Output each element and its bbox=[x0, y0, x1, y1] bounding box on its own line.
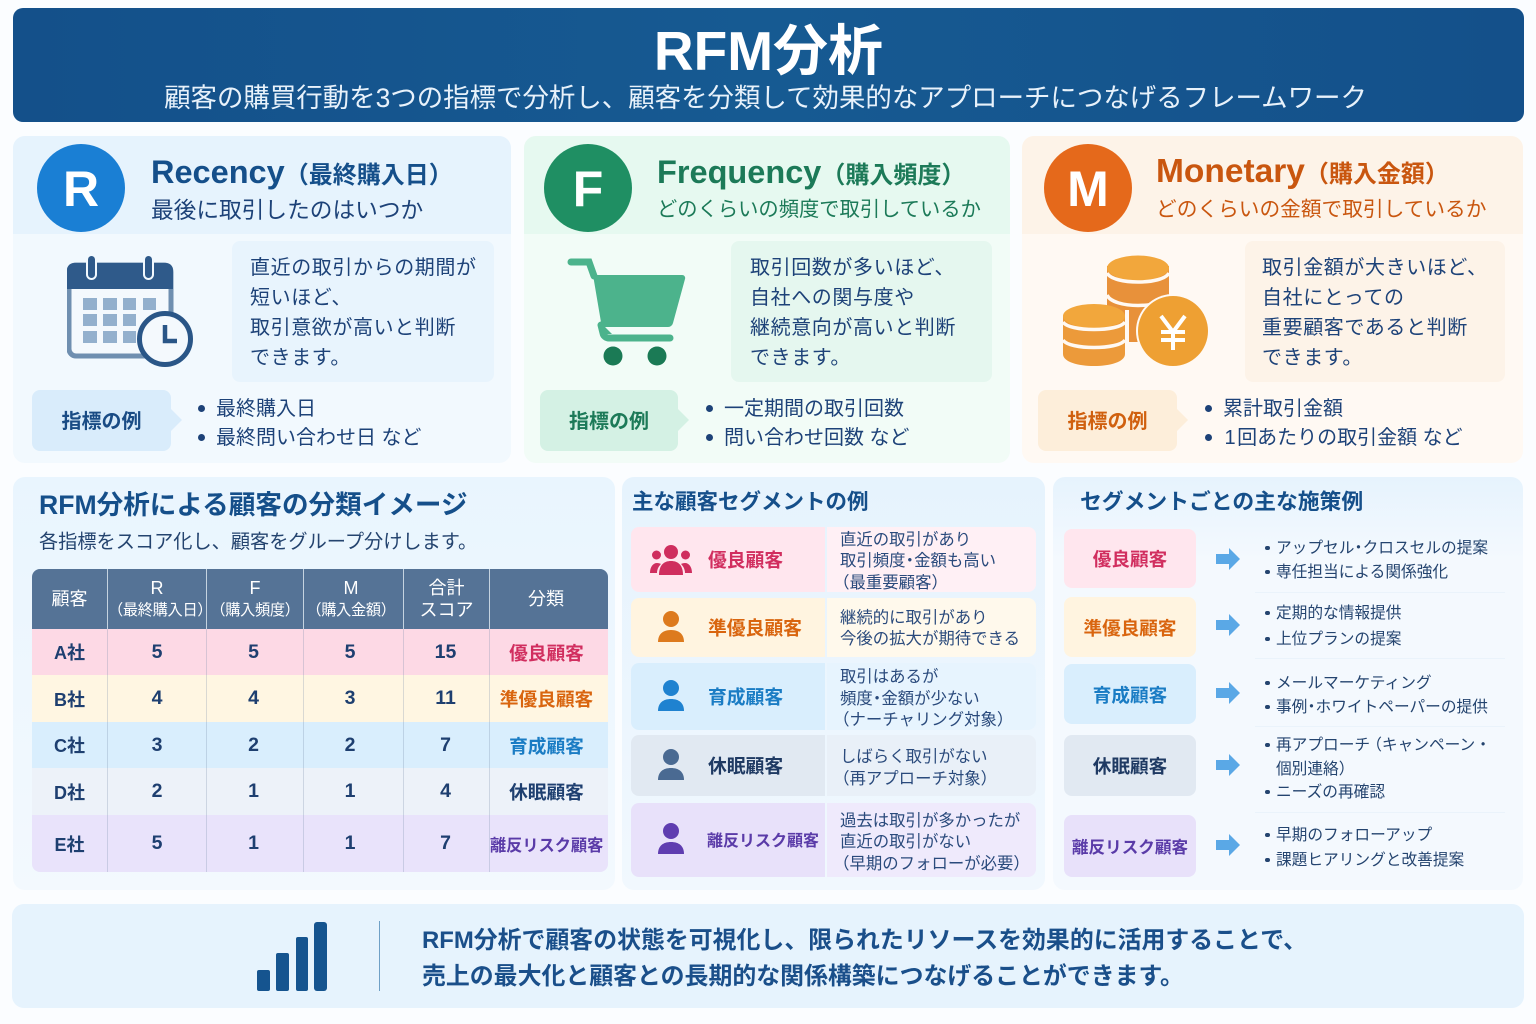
table: 2 bbox=[248, 734, 259, 756]
title: RFM分析 bbox=[654, 20, 883, 82]
segment: premium bbox=[631, 527, 1036, 592]
callout: indicator examples bbox=[32, 390, 171, 451]
actions: 早期のフォローアップ bbox=[1276, 827, 1432, 844]
description: できます。 bbox=[250, 347, 351, 369]
table bbox=[32, 569, 608, 872]
question: 最後に取引したのはいつか bbox=[151, 197, 423, 223]
header banner bbox=[13, 8, 1524, 122]
description box bbox=[1245, 241, 1505, 382]
actions: 再アプローチ（キャンペーン・ bbox=[1276, 737, 1491, 754]
header band bbox=[524, 136, 1010, 234]
description: 直近の取引からの期間が bbox=[250, 257, 477, 279]
panel: measures by segment bbox=[1053, 477, 1523, 890]
description: できます。 bbox=[1262, 347, 1363, 369]
description: 取引回数が多いほど、 bbox=[750, 257, 955, 279]
table: 分類 bbox=[528, 589, 564, 609]
table: 合計 bbox=[428, 578, 464, 598]
table: 1 bbox=[345, 832, 355, 854]
description box bbox=[232, 241, 494, 382]
indicator list: 一定期間の取引回数 bbox=[724, 398, 904, 420]
table: スコア bbox=[420, 600, 474, 620]
table: 離反リスク顧客 bbox=[490, 836, 603, 854]
table: 1 bbox=[248, 832, 259, 854]
table: M bbox=[344, 578, 358, 598]
label: 離反リスク顧客 bbox=[707, 833, 819, 850]
description: 短いほど、 bbox=[250, 287, 352, 309]
description: （最重要顧客） bbox=[833, 574, 948, 592]
label block bbox=[631, 663, 825, 730]
actions: 上位プランの提案 bbox=[1276, 631, 1402, 648]
callout: indicator examples: 指標の例 bbox=[569, 411, 649, 433]
callout: indicator examples: 指標の例 bbox=[1068, 411, 1148, 433]
description: （早期のフォローが必要） bbox=[833, 855, 1030, 873]
subtitle: 顧客の購買行動を3つの指標で分析し、顧客を分類して効果的なアプローチにつなげるフレームワーク bbox=[164, 83, 1367, 113]
actions: ニーズの再確認 bbox=[1276, 784, 1385, 801]
measure: nurture bbox=[1064, 664, 1488, 724]
description: 直近の取引がない bbox=[840, 833, 971, 851]
measure: churn risk bbox=[1064, 815, 1464, 877]
description bbox=[827, 527, 1036, 592]
description bbox=[827, 803, 1036, 877]
badge F: F bbox=[573, 161, 603, 217]
table: 4 bbox=[152, 687, 162, 709]
badge M: M bbox=[1067, 161, 1109, 217]
segment: dormant bbox=[631, 735, 997, 796]
indicator list: 累計取引金額 bbox=[1223, 398, 1343, 420]
label block bbox=[631, 735, 825, 796]
table: 3 bbox=[345, 687, 355, 709]
arrow bbox=[1216, 834, 1240, 856]
header band bbox=[13, 136, 511, 234]
panel: Monetary bbox=[1022, 136, 1523, 463]
description bbox=[827, 735, 1036, 796]
table: 7 bbox=[440, 734, 451, 756]
actions bbox=[1265, 604, 1402, 648]
label block bbox=[631, 803, 825, 877]
indicator list: 問い合わせ回数 など bbox=[724, 427, 910, 449]
table: （購入頻度） bbox=[210, 602, 300, 618]
panel: summary footer bbox=[12, 904, 1524, 1008]
actions: 事例・ホワイトペーパーの提供 bbox=[1276, 699, 1488, 716]
description: 頻度・金額が少ない bbox=[840, 690, 980, 708]
table: （最終購入日） bbox=[108, 602, 212, 618]
icon: shopping cart bbox=[568, 258, 686, 366]
table: E社 bbox=[54, 834, 84, 854]
header band bbox=[1022, 136, 1523, 234]
description: しばらく取引がない bbox=[840, 748, 988, 766]
indicator list: 1回あたりの取引金額 など bbox=[1224, 427, 1463, 449]
arrow bbox=[1216, 754, 1240, 776]
icon: person bbox=[658, 680, 684, 711]
description: 取引金額が大きいほど、 bbox=[1262, 257, 1488, 279]
description: 取引頻度・金額も高い bbox=[840, 552, 996, 570]
label: 休眠顧客 bbox=[1093, 756, 1167, 777]
label: 育成顧客 bbox=[1093, 684, 1167, 706]
table: 2 bbox=[345, 734, 355, 756]
description: 自社にとっての bbox=[1262, 287, 1405, 309]
icon: person bbox=[658, 749, 684, 780]
table: 休眠顧客 bbox=[509, 782, 584, 803]
indicator list bbox=[198, 398, 422, 449]
heading Frequency: Frequency（購入頻度） bbox=[657, 154, 965, 190]
indicator list bbox=[1205, 398, 1463, 449]
segment: churn risk bbox=[631, 803, 1036, 877]
table: （購入金額） bbox=[306, 602, 396, 618]
label: 休眠顧客 bbox=[708, 755, 783, 776]
measure: premium bbox=[1064, 529, 1488, 588]
table: 優良顧客 bbox=[509, 642, 584, 664]
actions bbox=[1265, 539, 1488, 581]
label bbox=[1064, 664, 1196, 724]
table: 準優良顧客 bbox=[500, 689, 593, 710]
actions: メールマーケティング bbox=[1276, 675, 1432, 692]
label: 優良顧客 bbox=[708, 549, 783, 570]
badge M bbox=[1044, 144, 1132, 232]
icon: person bbox=[658, 823, 684, 854]
icon: bar chart bbox=[257, 922, 327, 991]
table: 3 bbox=[152, 734, 162, 756]
measure: semi-premium bbox=[1064, 597, 1402, 657]
actions bbox=[1265, 826, 1464, 869]
badge R: R bbox=[63, 161, 99, 217]
measure: dormant bbox=[1064, 735, 1491, 801]
description bbox=[827, 598, 1036, 657]
table: 1 bbox=[345, 780, 355, 802]
table: 7 bbox=[440, 832, 451, 854]
table: 1 bbox=[248, 780, 259, 802]
description: 直近の取引があり bbox=[840, 531, 971, 549]
panel: Frequency bbox=[524, 136, 1010, 463]
table: R bbox=[150, 578, 164, 598]
description bbox=[827, 663, 1036, 730]
table: 2 bbox=[152, 780, 162, 802]
question: どのくらいの金額で取引しているか bbox=[1156, 198, 1486, 221]
table: 5 bbox=[152, 832, 162, 854]
description: 取引はあるが bbox=[840, 668, 938, 686]
description: 重要顧客であると判断 bbox=[1262, 317, 1468, 339]
table: F bbox=[250, 578, 260, 598]
description: 過去は取引が多かったが bbox=[840, 812, 1020, 830]
icon: coins with yen bbox=[1063, 256, 1208, 366]
table: B社 bbox=[54, 690, 85, 710]
description: 取引意欲が高いと判断 bbox=[250, 317, 456, 339]
label: 準優良顧客 bbox=[1084, 618, 1176, 638]
table: 15 bbox=[435, 640, 456, 662]
actions bbox=[1265, 736, 1491, 801]
segment: semi-premium bbox=[631, 598, 1036, 657]
description: 継続意向が高いと判断 bbox=[750, 317, 956, 339]
summary text bbox=[422, 927, 1307, 990]
label: 育成顧客 bbox=[708, 686, 783, 707]
table: C社 bbox=[54, 736, 85, 756]
actions: 専任担当による関係強化 bbox=[1276, 564, 1448, 581]
description bbox=[250, 257, 477, 369]
table: D社 bbox=[54, 782, 85, 802]
summary text: 売上の最大化と顧客との長期的な関係構築につなげることができます。 bbox=[422, 963, 1184, 990]
actions bbox=[1265, 674, 1488, 716]
table: 5 bbox=[248, 640, 259, 662]
panel: classification table bbox=[13, 477, 615, 890]
heading: 主な顧客セグメントの例 bbox=[632, 490, 869, 514]
description: （ナーチャリング対象） bbox=[833, 711, 1013, 729]
heading Recency: Recency（最終購入日） bbox=[151, 154, 453, 190]
label bbox=[1064, 529, 1196, 588]
callout: indicator examples: 指標の例 bbox=[62, 411, 142, 433]
label: 準優良顧客 bbox=[708, 617, 802, 638]
indicator list bbox=[706, 398, 910, 449]
description box bbox=[731, 241, 992, 382]
description: 自社への関与度や bbox=[750, 287, 915, 309]
description bbox=[1262, 257, 1488, 369]
table: 11 bbox=[435, 687, 456, 709]
table: 顧客 bbox=[52, 589, 88, 609]
table: 5 bbox=[345, 640, 355, 662]
label bbox=[1064, 597, 1196, 657]
actions: 定期的な情報提供 bbox=[1276, 605, 1402, 622]
label: 離反リスク顧客 bbox=[1072, 838, 1188, 857]
panel: customer segments bbox=[622, 477, 1045, 890]
table: 4 bbox=[248, 687, 259, 709]
description: （再アプローチ対象） bbox=[833, 770, 997, 788]
heading: RFM分析による顧客の分類イメージ bbox=[39, 490, 468, 520]
subheading: 各指標をスコア化し、顧客をグループ分けします。 bbox=[39, 532, 477, 553]
icon: calendar with clock bbox=[67, 256, 193, 367]
actions: 個別連絡） bbox=[1276, 760, 1354, 778]
label bbox=[1064, 735, 1196, 796]
segment: nurture bbox=[631, 663, 1013, 730]
indicator list: 最終問い合わせ日 など bbox=[216, 427, 422, 449]
table: A社 bbox=[54, 643, 85, 663]
label block bbox=[631, 527, 825, 592]
question: どのくらいの頻度で取引しているか bbox=[657, 199, 981, 221]
description: 継続的に取引があり bbox=[840, 608, 988, 626]
table: 5 bbox=[152, 640, 162, 662]
table: 4 bbox=[440, 780, 451, 802]
arrow bbox=[1216, 682, 1240, 704]
badge R bbox=[37, 144, 125, 232]
arrow bbox=[1216, 614, 1240, 636]
heading: セグメントごとの主な施策例 bbox=[1080, 489, 1363, 514]
description: できます。 bbox=[750, 347, 851, 369]
callout: indicator examples bbox=[1038, 390, 1177, 451]
table: 育成顧客 bbox=[509, 736, 584, 756]
label: 優良顧客 bbox=[1093, 549, 1167, 570]
summary text: RFM分析で顧客の状態を可視化し、限られたリソースを効果的に活用することで、 bbox=[422, 927, 1307, 954]
description bbox=[750, 257, 956, 369]
arrow bbox=[1216, 548, 1240, 570]
actions: アップセル・クロスセルの提案 bbox=[1276, 540, 1488, 557]
panel: Recency bbox=[13, 136, 511, 463]
callout: indicator examples bbox=[540, 390, 678, 451]
actions: 課題ヒアリングと改善提案 bbox=[1276, 852, 1464, 869]
badge F bbox=[544, 144, 632, 232]
description: 今後の拡大が期待できる bbox=[840, 630, 1020, 648]
heading Monetary: Monetary（購入金額） bbox=[1156, 153, 1449, 190]
indicator list: 最終購入日 bbox=[216, 398, 316, 420]
label bbox=[1064, 815, 1196, 877]
label block bbox=[631, 598, 825, 657]
icon: person bbox=[658, 611, 684, 642]
icon: group bbox=[650, 545, 692, 575]
